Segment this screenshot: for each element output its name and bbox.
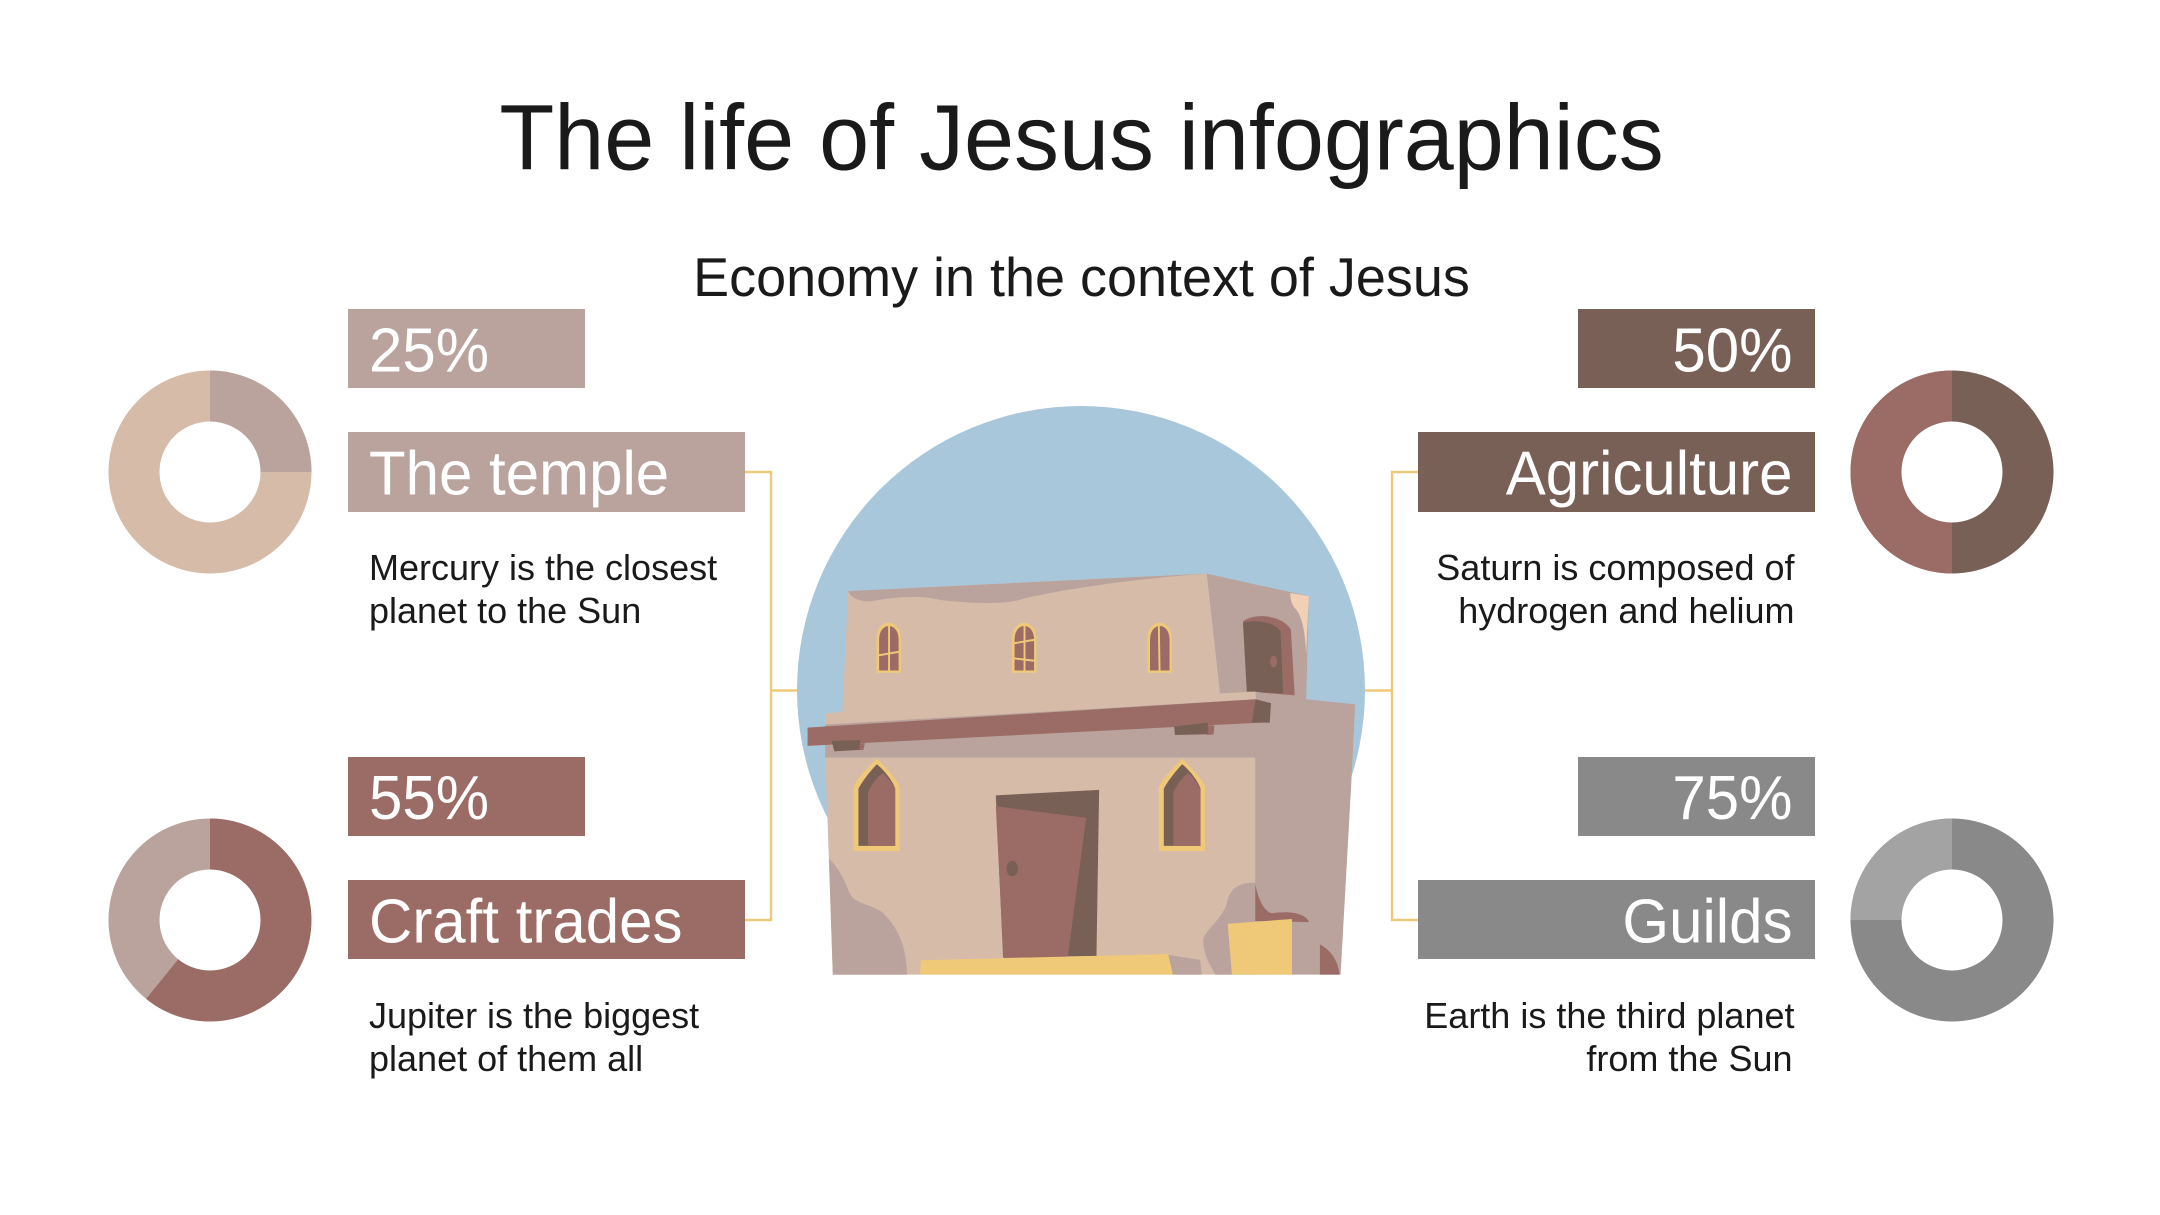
- description: planet of them all: [369, 1038, 643, 1079]
- connector lines: [745, 472, 1418, 920]
- label bar: Agriculture: [1506, 439, 1792, 508]
- donut chart: 50%: [1850, 370, 2054, 574]
- subtitle: Economy in the context of Jesus: [693, 248, 1470, 308]
- description: hydrogen and helium: [1458, 590, 1794, 631]
- percentage tag: [348, 309, 585, 388]
- description: from the Sun: [1586, 1038, 1792, 1079]
- percentage tag: [1578, 309, 1815, 388]
- panel: agriculture: [1418, 309, 2054, 631]
- upper windows: [876, 623, 1172, 673]
- label bar: Guilds: [1622, 887, 1792, 956]
- donut chart: 55%: [108, 818, 312, 1022]
- percentage tag: [1578, 757, 1815, 836]
- label bar: [1418, 432, 1815, 512]
- percentage tag: 50%: [1672, 316, 1792, 385]
- panel: guilds: [1418, 757, 2054, 1079]
- illustration: house in front of sky circle: [797, 406, 1365, 975]
- label bar: The temple: [369, 439, 669, 508]
- description: Jupiter is the biggest: [369, 995, 699, 1036]
- label bar: [348, 880, 745, 959]
- donut chart: 75%: [1850, 818, 2054, 1022]
- description: Saturn is composed of: [1436, 547, 1794, 588]
- percentage tag: [348, 757, 585, 836]
- sky circle: [797, 406, 1365, 974]
- door: [996, 790, 1099, 958]
- description: Earth is the third planet: [1424, 995, 1794, 1036]
- label bar: [348, 432, 745, 512]
- donut chart: 25%: [108, 370, 312, 574]
- title: The life of Jesus infographics: [499, 86, 1664, 190]
- label bar: Craft trades: [369, 887, 682, 956]
- percentage tag: 75%: [1672, 763, 1792, 832]
- percentage tag: 25%: [369, 316, 489, 385]
- house: [808, 574, 1355, 975]
- panel: the temple: [108, 309, 745, 631]
- label bar: [1418, 880, 1815, 959]
- panel: craft trades: [108, 757, 745, 1079]
- description: Mercury is the closest: [369, 547, 717, 588]
- percentage tag: 55%: [369, 763, 489, 832]
- lower windows: [853, 759, 1205, 851]
- description: planet to the Sun: [369, 590, 641, 631]
